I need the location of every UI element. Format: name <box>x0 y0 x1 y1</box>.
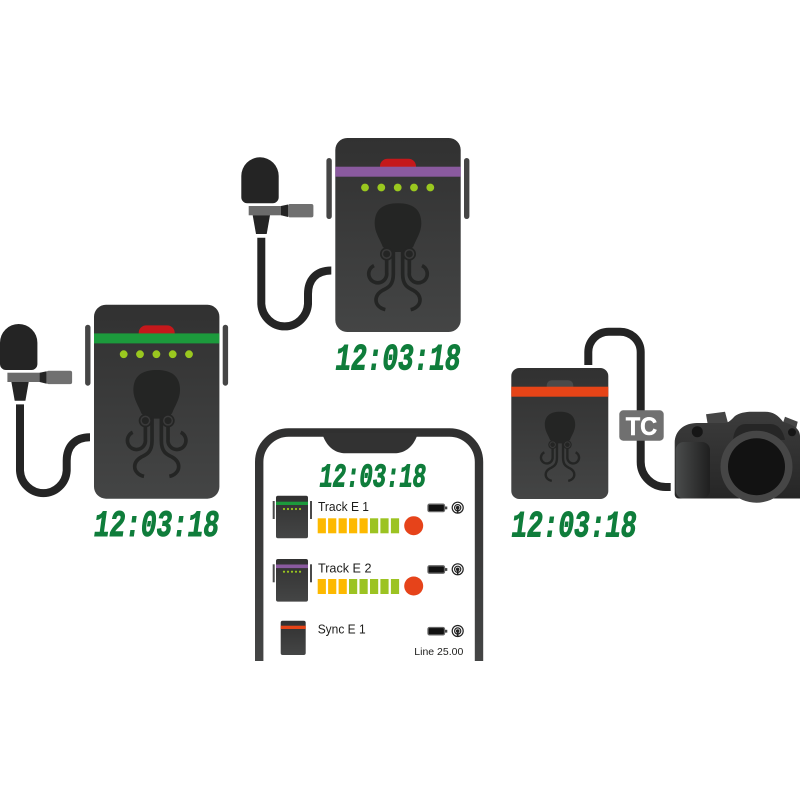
LED dots <box>120 350 193 358</box>
mini transmitter <box>273 496 312 538</box>
timecode: right: 12:03:18 <box>512 506 636 548</box>
record indicator <box>404 576 423 596</box>
battery icon <box>428 628 447 635</box>
label: Track E 2 <box>318 561 372 575</box>
signal icon <box>452 502 463 514</box>
lavalier microphone <box>0 324 72 401</box>
antenna left <box>326 158 332 219</box>
left dial <box>706 412 728 426</box>
label: Sync E 1 <box>318 622 366 636</box>
antenna right <box>223 325 228 386</box>
top button <box>547 380 573 388</box>
device body <box>94 305 219 499</box>
right dial <box>782 417 798 433</box>
antenna left <box>85 325 90 386</box>
phone frame <box>259 432 479 661</box>
record indicator <box>404 516 423 535</box>
timecode: left: 12:03:18 <box>94 506 219 548</box>
label: Track E 1 <box>318 500 369 514</box>
signal icon <box>452 564 463 575</box>
TC badge: TC <box>626 413 657 441</box>
device body <box>335 138 461 332</box>
sync body <box>511 368 608 499</box>
octopus logo <box>541 412 579 481</box>
row: Track E 1 <box>273 496 463 538</box>
timecode: phone: 12:03:18 <box>320 460 426 497</box>
line rate: Line 25.00 <box>414 646 463 658</box>
timecode: top: 12:03:18 <box>336 340 460 382</box>
smartphone <box>259 432 479 661</box>
octopus logo <box>369 203 427 310</box>
level meter <box>318 579 399 594</box>
grip <box>676 442 710 499</box>
row: Track E 2 <box>273 559 463 602</box>
left button <box>692 426 703 437</box>
viewfinder hump <box>733 424 785 440</box>
lavalier microphone <box>241 157 313 234</box>
purple band <box>335 167 461 177</box>
microphone cable <box>261 238 331 326</box>
lens <box>720 431 792 503</box>
signal icon <box>452 626 463 637</box>
right button <box>788 428 796 436</box>
camera body <box>675 412 800 498</box>
mini sync device <box>281 621 306 655</box>
camera <box>675 412 800 503</box>
orange band <box>511 387 608 397</box>
battery icon <box>428 504 447 512</box>
red record button <box>380 159 416 168</box>
antenna right <box>464 158 469 219</box>
row: Sync E 1 <box>281 621 463 658</box>
octopus logo <box>127 370 186 476</box>
timecode cable <box>588 332 671 487</box>
red record button <box>139 325 175 335</box>
mini transmitter <box>273 559 312 602</box>
LED dots <box>361 184 434 191</box>
green band <box>94 333 219 343</box>
microphone cable <box>20 404 90 493</box>
transmitter with lavalier mic: purple track <box>241 138 469 332</box>
transmitter with lavalier mic: green track <box>0 305 228 499</box>
battery icon <box>428 566 447 573</box>
sync device with camera cable <box>511 332 671 499</box>
notch <box>322 433 418 453</box>
TC badge <box>619 410 664 441</box>
level meter <box>318 518 399 533</box>
